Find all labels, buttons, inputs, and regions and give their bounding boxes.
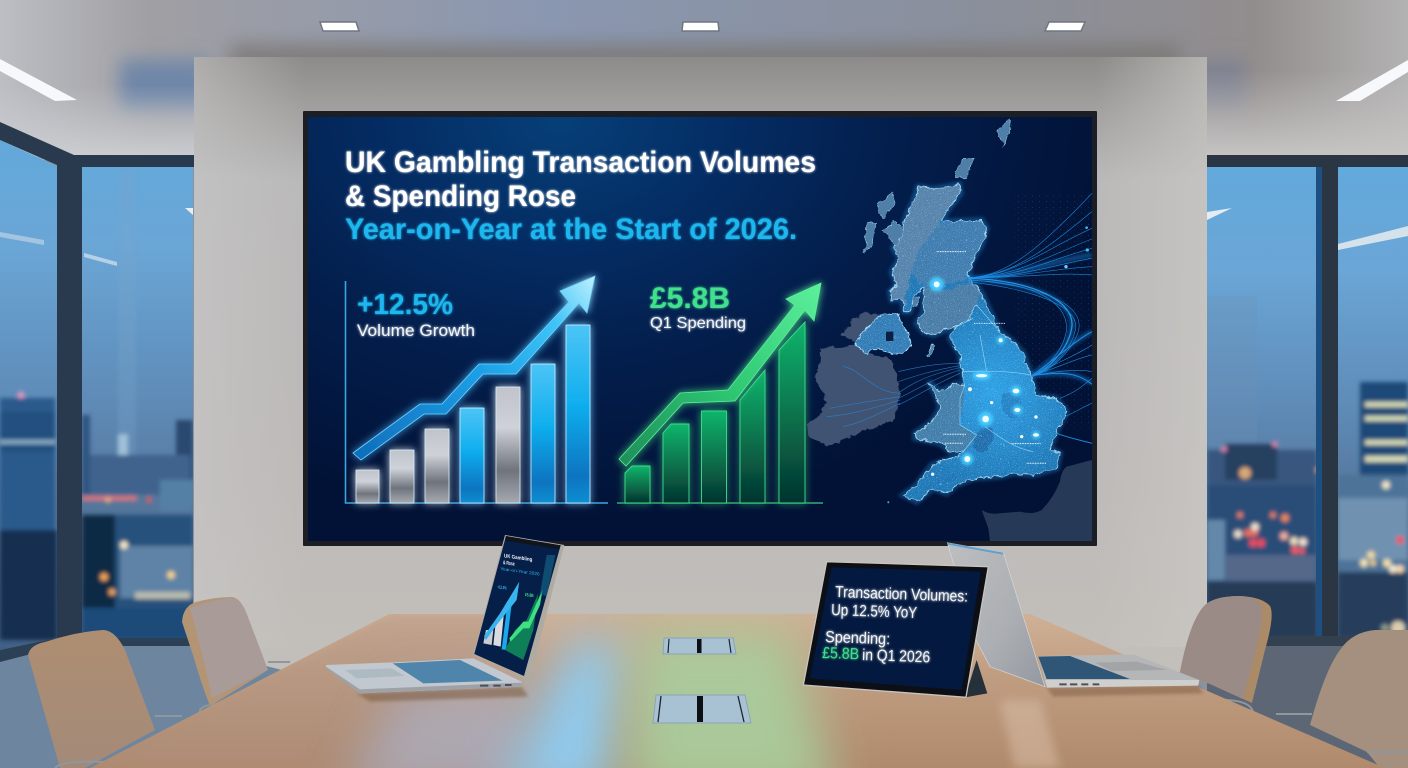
floor right bbox=[1207, 640, 1408, 768]
tablet text: in Q1 2026 bbox=[862, 647, 931, 666]
laptop screen content: Year-on-Year 2026 bbox=[500, 566, 540, 577]
blue growth arrow bbox=[353, 276, 595, 460]
light strip right bbox=[1336, 60, 1408, 101]
tablet text: Spending: bbox=[825, 629, 890, 648]
screen panel bbox=[308, 117, 1092, 541]
downlight 3 bbox=[1045, 22, 1085, 31]
data flow lines bbox=[898, 193, 1092, 443]
tablet text: £5.8B bbox=[822, 645, 859, 663]
ceiling lights bbox=[0, 22, 1408, 101]
chair far right bbox=[1180, 596, 1272, 703]
left ceiling blue wash bbox=[120, 60, 210, 110]
wall bbox=[194, 57, 1207, 672]
screen reflection: green bbox=[625, 630, 840, 768]
laptop screen content: UK Gambling bbox=[504, 553, 532, 563]
skyline left bbox=[0, 130, 195, 660]
laptop lid back bbox=[947, 543, 1045, 687]
laptop screen content: £5.8B bbox=[525, 592, 534, 598]
screen reflection: blue bbox=[495, 640, 625, 768]
right window bbox=[1207, 155, 1408, 646]
title: Year-on-Year at the Start of 2026. bbox=[345, 213, 797, 246]
laptop screen content bbox=[483, 553, 555, 660]
green bar chart bbox=[617, 282, 823, 503]
laptop ports bbox=[480, 682, 512, 689]
conference table bbox=[90, 614, 1385, 768]
left window bbox=[0, 122, 195, 662]
tablet stand bbox=[965, 660, 987, 697]
tablet body bbox=[803, 562, 988, 697]
bars bbox=[356, 325, 590, 503]
micro labels bbox=[937, 252, 1047, 463]
screen bezel bbox=[303, 111, 1097, 546]
blue bar chart bbox=[346, 276, 608, 503]
display screen bbox=[303, 111, 1097, 546]
map regions bbox=[890, 184, 1067, 502]
county lines bbox=[953, 305, 1033, 452]
window frames right bbox=[1207, 155, 1408, 645]
laptop base bbox=[1038, 654, 1199, 688]
title: UK Gambling Transaction Volumes bbox=[345, 146, 816, 179]
france coast bbox=[982, 460, 1092, 541]
window sill left bbox=[0, 638, 193, 662]
left ceiling light falloff bbox=[0, 85, 195, 157]
ceiling shade above wall bbox=[230, 44, 1180, 74]
stat: volume growth: +12.5% bbox=[357, 289, 453, 321]
right chairs bbox=[1180, 596, 1408, 768]
chair far left bbox=[182, 597, 268, 706]
tablet text: Up 12.5% YoY bbox=[831, 602, 918, 622]
laptop screen bbox=[474, 536, 561, 676]
left table tint bbox=[266, 615, 484, 686]
chair rails bbox=[55, 662, 290, 768]
stat: Q1 spending bbox=[650, 282, 746, 332]
map outer glow bbox=[890, 184, 1067, 502]
reflection lilac bbox=[340, 680, 530, 768]
scottish islands bbox=[865, 118, 1012, 358]
ports bbox=[1059, 681, 1099, 687]
table port 2 bbox=[653, 695, 751, 723]
baseline bbox=[617, 502, 823, 504]
flow line backdrop bbox=[968, 195, 1093, 428]
keyboard bbox=[393, 660, 503, 683]
laptop base bbox=[326, 658, 522, 693]
left chairs bbox=[28, 597, 290, 768]
tablet reflection bbox=[1000, 700, 1060, 768]
chair rails bbox=[1210, 700, 1408, 752]
trackpad bbox=[345, 668, 405, 678]
skyline right bbox=[1207, 166, 1408, 638]
laptop screen content: +12.5% bbox=[497, 584, 507, 591]
window frames bbox=[0, 122, 195, 645]
laptop screen content: & Rose bbox=[503, 560, 515, 568]
great britain bbox=[890, 184, 1067, 502]
title: & Spending Rose bbox=[345, 180, 576, 213]
tablet text bbox=[822, 584, 968, 666]
downlight 1 bbox=[320, 22, 359, 31]
table port 1 bbox=[663, 638, 736, 654]
downlight 2 bbox=[682, 22, 719, 31]
laptop lid bbox=[473, 535, 564, 685]
bars bbox=[625, 322, 805, 503]
ireland bbox=[807, 312, 912, 447]
laptop shadow bbox=[357, 687, 528, 702]
UK map bbox=[807, 118, 1093, 541]
laptop left bbox=[326, 535, 564, 702]
tablet bbox=[803, 562, 988, 697]
chair near right bbox=[1310, 630, 1408, 768]
ceiling bbox=[0, 0, 1408, 160]
glowing city nodes bbox=[887, 226, 1089, 503]
right ceiling wash bbox=[1195, 60, 1245, 110]
laptop shadow bbox=[1047, 685, 1203, 697]
green growth arrow bbox=[619, 283, 821, 466]
tablet screen bbox=[810, 567, 981, 690]
stat: Q1 spending: Q1 Spending bbox=[650, 315, 746, 332]
keyboard bbox=[1038, 656, 1130, 679]
table reflections bbox=[266, 614, 1060, 768]
light strip left bbox=[0, 59, 77, 101]
stat: volume growth: Volume Growth bbox=[357, 321, 475, 340]
stat: volume growth bbox=[357, 289, 475, 340]
stat: Q1 spending: £5.8B bbox=[650, 282, 730, 315]
table top bbox=[90, 614, 1385, 768]
axes bbox=[346, 281, 608, 503]
floor left bbox=[0, 630, 300, 768]
title bbox=[345, 146, 816, 246]
right laptop rear bbox=[947, 543, 1203, 697]
chair near left bbox=[28, 630, 155, 768]
right ceiling light falloff bbox=[1207, 70, 1408, 157]
tablet text: Transaction Volumes: bbox=[835, 584, 968, 606]
trackpad bbox=[1095, 662, 1167, 671]
